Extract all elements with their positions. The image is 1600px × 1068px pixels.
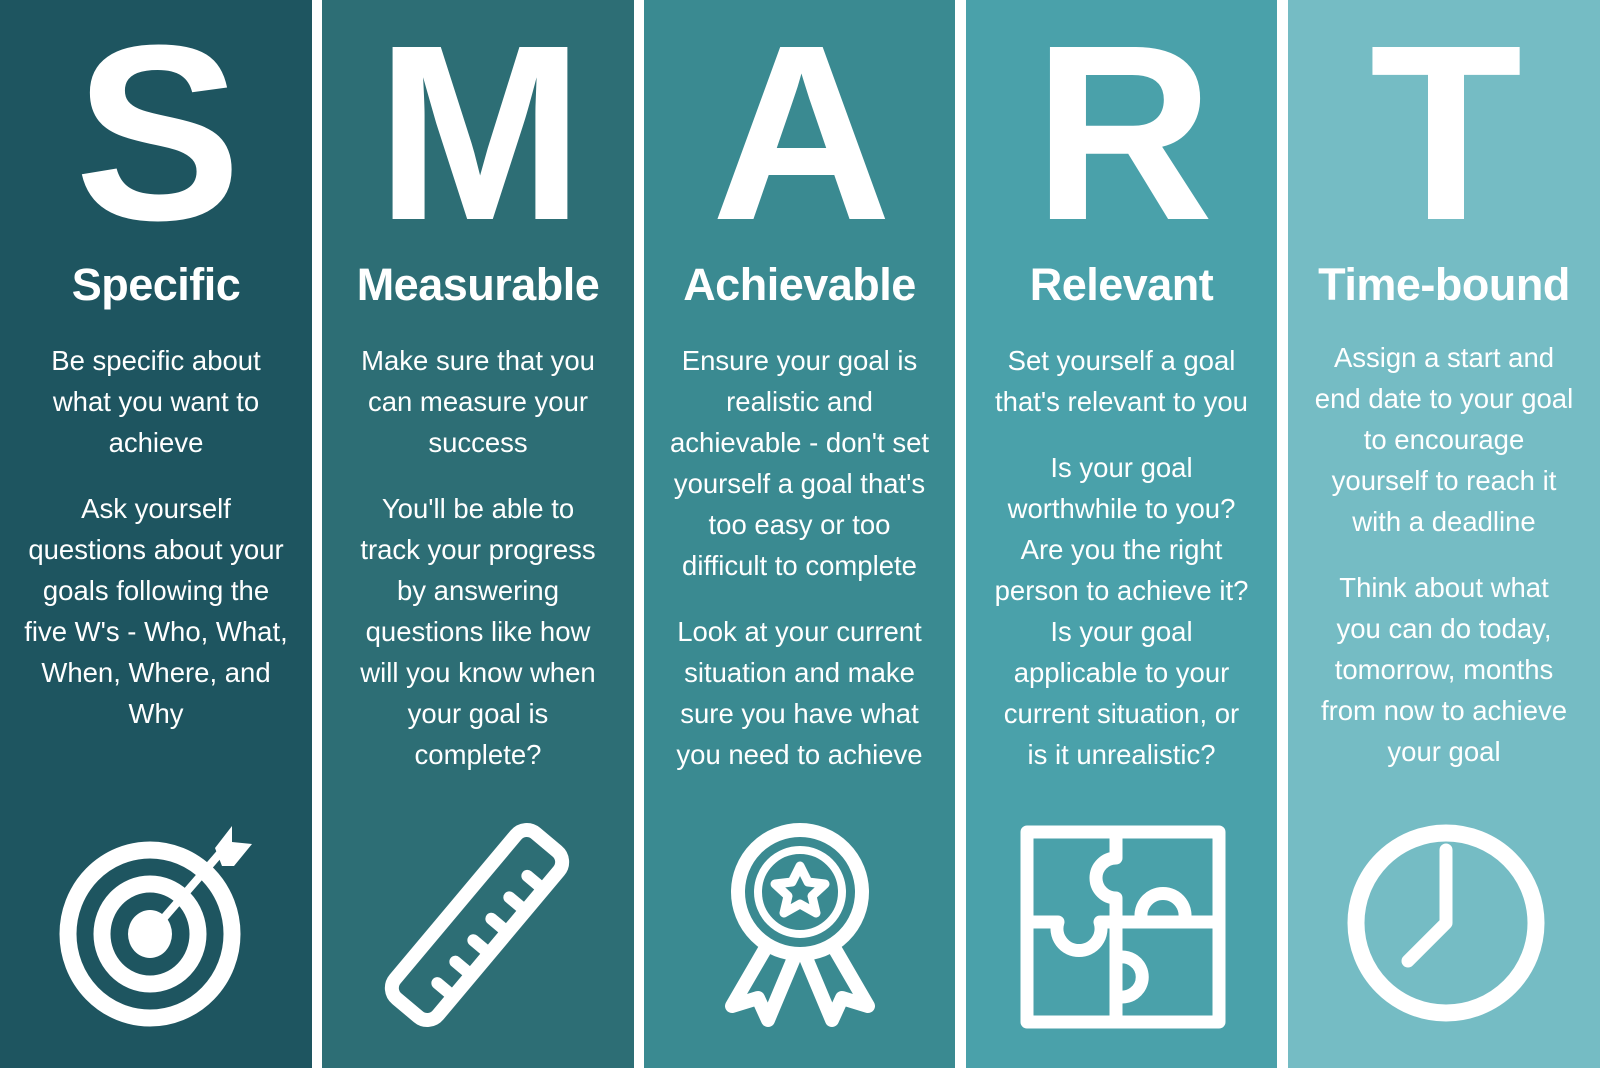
text: achievable body: you need to achieve <box>676 739 923 770</box>
letter S: S <box>75 0 237 272</box>
text: relevant body: is it unrealistic? <box>1028 739 1216 770</box>
text: time-bound body: your goal <box>1387 736 1501 767</box>
text: relevant body: current situation, or <box>1004 698 1239 729</box>
text: measurable body: success <box>428 427 528 458</box>
text: specific body: Why <box>128 698 184 729</box>
text: specific body: questions about your <box>28 534 284 565</box>
text: measurable body: Make sure that you <box>361 345 595 376</box>
text: achievable body: achievable - don't set <box>670 427 929 458</box>
text: measurable body: track your progress <box>360 534 596 565</box>
text: achievable body: sure you have what <box>680 698 919 729</box>
text: achievable body: too easy or too <box>709 509 890 540</box>
text: measurable body: can measure your <box>368 386 588 417</box>
text: measurable body: complete? <box>415 739 541 770</box>
text: achievable body: situation and make <box>684 657 915 688</box>
text: specific body: goals following the <box>43 575 269 606</box>
text: measurable body: You'll be able to <box>382 493 574 524</box>
text: relevant body: person to achieve it? <box>995 575 1248 606</box>
letter R: R <box>1033 0 1210 272</box>
text: relevant body: that's relevant to you <box>995 386 1248 417</box>
letter T: T <box>1370 0 1518 272</box>
text: specific body: achieve <box>109 427 203 458</box>
text: time-bound body: to encourage <box>1364 424 1524 455</box>
text: measurable body: your goal is <box>408 698 548 729</box>
panel: specific <box>0 0 312 1068</box>
text: time-bound body <box>1315 342 1573 767</box>
text: specific body: When, Where, and <box>41 657 271 688</box>
text: achievable body: realistic and <box>726 386 873 417</box>
panel: measurable <box>322 0 634 1068</box>
text: time-bound body: end date to your goal <box>1315 383 1573 414</box>
text: achievable body: yourself a goal that's <box>674 468 925 499</box>
text: achievable body <box>670 345 929 770</box>
text: time-bound body: from now to achieve <box>1321 695 1567 726</box>
text: specific body: what you want to <box>53 386 259 417</box>
text: time-bound body: yourself to reach it <box>1332 465 1556 496</box>
text: time-bound body: with a deadline <box>1352 506 1536 537</box>
text: measurable body: questions like how <box>366 616 590 647</box>
icon: clock <box>1348 824 1544 1022</box>
icon: puzzle <box>1020 826 1226 1028</box>
text: time-bound body: you can do today, <box>1336 613 1552 644</box>
text: achievable body: difficult to complete <box>682 550 917 581</box>
text: measurable body: by answering <box>397 575 559 606</box>
text: specific body: five W's - Who, What, <box>24 616 288 647</box>
icon: award medal <box>725 823 875 1027</box>
panel: relevant <box>966 0 1277 1068</box>
icon: ruler <box>384 823 570 1027</box>
panel: time-bound <box>1288 0 1600 1068</box>
text: time-bound body: tomorrow, months <box>1335 654 1553 685</box>
text: achievable body: Ensure your goal is <box>682 345 917 376</box>
text: time-bound body: Think about what <box>1339 572 1549 603</box>
text: relevant body: Are you the right <box>1021 534 1222 565</box>
panel: achievable <box>644 0 955 1068</box>
text: relevant body: Set yourself a goal <box>1008 345 1235 376</box>
heading: Achievable: Achievable <box>683 259 916 310</box>
text: relevant body: worthwhile to you? <box>1008 493 1235 524</box>
text: relevant body: applicable to your <box>1014 657 1229 688</box>
heading: Specific: Specific <box>72 259 240 310</box>
text: specific body: Be specific about <box>51 345 261 376</box>
heading: Measurable: Measurable <box>357 259 599 310</box>
text: relevant body: Is your goal <box>1050 452 1193 483</box>
text: measurable body: will you know when <box>360 657 596 688</box>
icon: target <box>60 826 252 1026</box>
text: time-bound body: Assign a start and <box>1334 342 1554 373</box>
text: measurable body <box>360 345 596 770</box>
text: achievable body: Look at your current <box>677 616 922 647</box>
letter M: M <box>376 0 580 272</box>
text: specific body: Ask yourself <box>81 493 231 524</box>
text: relevant body: Is your goal <box>1050 616 1193 647</box>
letter A: A <box>711 0 888 272</box>
heading: Time-bound: Time-bound <box>1318 259 1570 310</box>
text: relevant body <box>995 345 1248 770</box>
heading: Relevant: Relevant <box>1030 259 1213 310</box>
text: specific body <box>24 345 288 729</box>
